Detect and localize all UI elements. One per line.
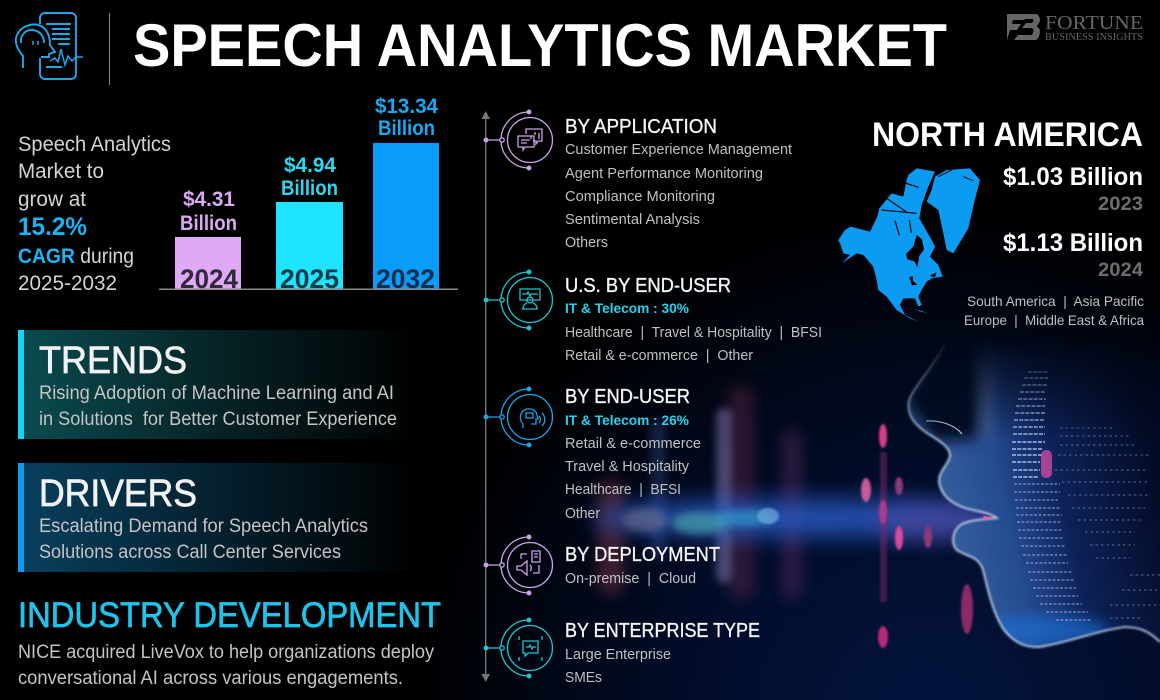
other regions: Europe | Middle East & Africa — [964, 312, 1144, 328]
section: by enterprise type: Large Enterprise — [565, 646, 671, 663]
icon: head with voice — [520, 409, 545, 428]
other regions — [964, 293, 1144, 328]
growth statement — [18, 133, 171, 295]
icon: monitor with person — [520, 289, 540, 309]
section: by deployment: BY DEPLOYMENT — [565, 544, 720, 566]
node: by application — [484, 110, 552, 170]
section: by end-user: BY END-USER — [565, 386, 690, 408]
panel: industry development — [18, 596, 441, 689]
section: by end-user: Travel & Hospitality — [565, 458, 689, 475]
growth statement: Market to — [18, 160, 104, 183]
section: by application: BY APPLICATION — [565, 116, 717, 138]
node: u.s. by end-user — [484, 270, 552, 330]
panel: industry development: conversational AI across various engagements. — [18, 668, 403, 689]
section: by application: Compliance Monitoring — [565, 188, 715, 205]
bar 2032 — [373, 95, 439, 294]
bar 2032: 2032 — [376, 264, 435, 294]
section: by enterprise type: BY ENTERPRISE TYPE — [565, 620, 760, 642]
section: u.s. by end-user: Retail & e-commerce | Other — [565, 347, 753, 364]
section: by application: Others — [565, 234, 608, 251]
section: by deployment: On-premise | Cloud — [565, 570, 696, 587]
stat: north america 2024: 2024 — [1098, 260, 1143, 281]
panel: trends: TRENDS — [39, 340, 187, 382]
icon: chat chart — [518, 129, 542, 150]
title: SPEECH ANALYTICS MARKET — [133, 12, 947, 79]
section: u.s. by end-user: Healthcare | Travel & Hospitality | BFSI — [565, 324, 822, 341]
section: by enterprise type: SMEs — [565, 669, 602, 686]
sound wave glow — [590, 385, 1010, 648]
growth statement: Speech Analytics — [18, 133, 171, 156]
panel: trends: in Solutions for Better Customer Experience — [39, 409, 397, 430]
bar 2025: 2025 — [280, 264, 339, 294]
header divider — [109, 13, 110, 85]
bar 2032: $13.34 — [375, 95, 438, 118]
panel: drivers: Escalating Demand for Speech Analytics — [39, 516, 368, 537]
heading: north america: NORTH AMERICA — [872, 116, 1143, 154]
header icon — [16, 13, 83, 79]
icon: screen with signal — [519, 637, 542, 660]
bar 2025: Billion — [281, 177, 338, 200]
stat: north america 2023 — [1003, 163, 1143, 215]
panel: drivers: Solutions across Call Center Services — [39, 542, 341, 563]
panel: drivers: DRIVERS — [39, 473, 197, 515]
icon: north america map — [838, 168, 980, 322]
face illustration — [905, 330, 1160, 647]
section: u.s. by end-user: U.S. BY END-USER — [565, 275, 731, 297]
growth statement: 15.2% — [18, 213, 87, 241]
section: by end-user: IT & Telecom : 26% — [565, 412, 690, 428]
node: by end-user — [484, 387, 552, 447]
bar 2025 — [276, 154, 343, 294]
section: by end-user: Retail & e-commerce — [565, 435, 701, 452]
bar 2025: $4.94 — [284, 154, 336, 177]
section: u.s. by end-user — [565, 275, 822, 364]
section: by application: Sentimental Analysis — [565, 211, 700, 228]
stat: north america 2024: $1.13 Billion — [1003, 229, 1143, 257]
other regions: South America | Asia Pacific — [967, 293, 1144, 309]
panel: trends: Rising Adoption of Machine Learning and AI — [39, 383, 394, 404]
bar chart — [159, 95, 458, 294]
growth statement: CAGR during — [18, 245, 134, 268]
growth statement: 2025-2032 — [18, 272, 117, 295]
panel: industry development: NICE acquired LiveVox to help organizations deploy — [18, 642, 434, 663]
section: u.s. by end-user: IT & Telecom : 30% — [565, 300, 690, 316]
node: by deployment — [484, 535, 552, 595]
growth statement: grow at — [18, 188, 86, 211]
section: by deployment — [565, 544, 720, 587]
stat: north america 2023: $1.03 Billion — [1003, 163, 1143, 191]
bar 2024: 2024 — [180, 264, 238, 294]
logo: Fortune Business Insights: BUSINESS INSIGHTS — [1045, 32, 1143, 43]
stat: north america 2024 — [1003, 229, 1143, 281]
bar 2032: Billion — [378, 117, 435, 140]
section: by end-user — [565, 386, 701, 522]
logo: Fortune Business Insights — [1007, 12, 1143, 43]
node: by enterprise type — [484, 618, 552, 678]
icon: speaker and document — [517, 551, 540, 575]
section: by application: Customer Experience Management — [565, 141, 793, 158]
panel: trends — [18, 330, 418, 439]
bar 2024: $4.31 — [183, 188, 235, 211]
section: by end-user: Other — [565, 505, 600, 522]
timeline axis — [482, 111, 490, 682]
section: by application: Agent Performance Monitoring — [565, 165, 763, 182]
bar 2024: Billion — [180, 212, 237, 235]
section: by end-user: Healthcare | BFSI — [565, 481, 681, 498]
panel: drivers — [18, 463, 418, 572]
bar 2024 — [175, 188, 241, 294]
panel: industry development: INDUSTRY DEVELOPMENT — [18, 596, 441, 635]
stat: north america 2023: 2023 — [1098, 194, 1143, 215]
section: by enterprise type — [565, 620, 760, 686]
logo: Fortune Business Insights: FORTUNE — [1045, 12, 1143, 34]
section: by application — [565, 116, 793, 251]
